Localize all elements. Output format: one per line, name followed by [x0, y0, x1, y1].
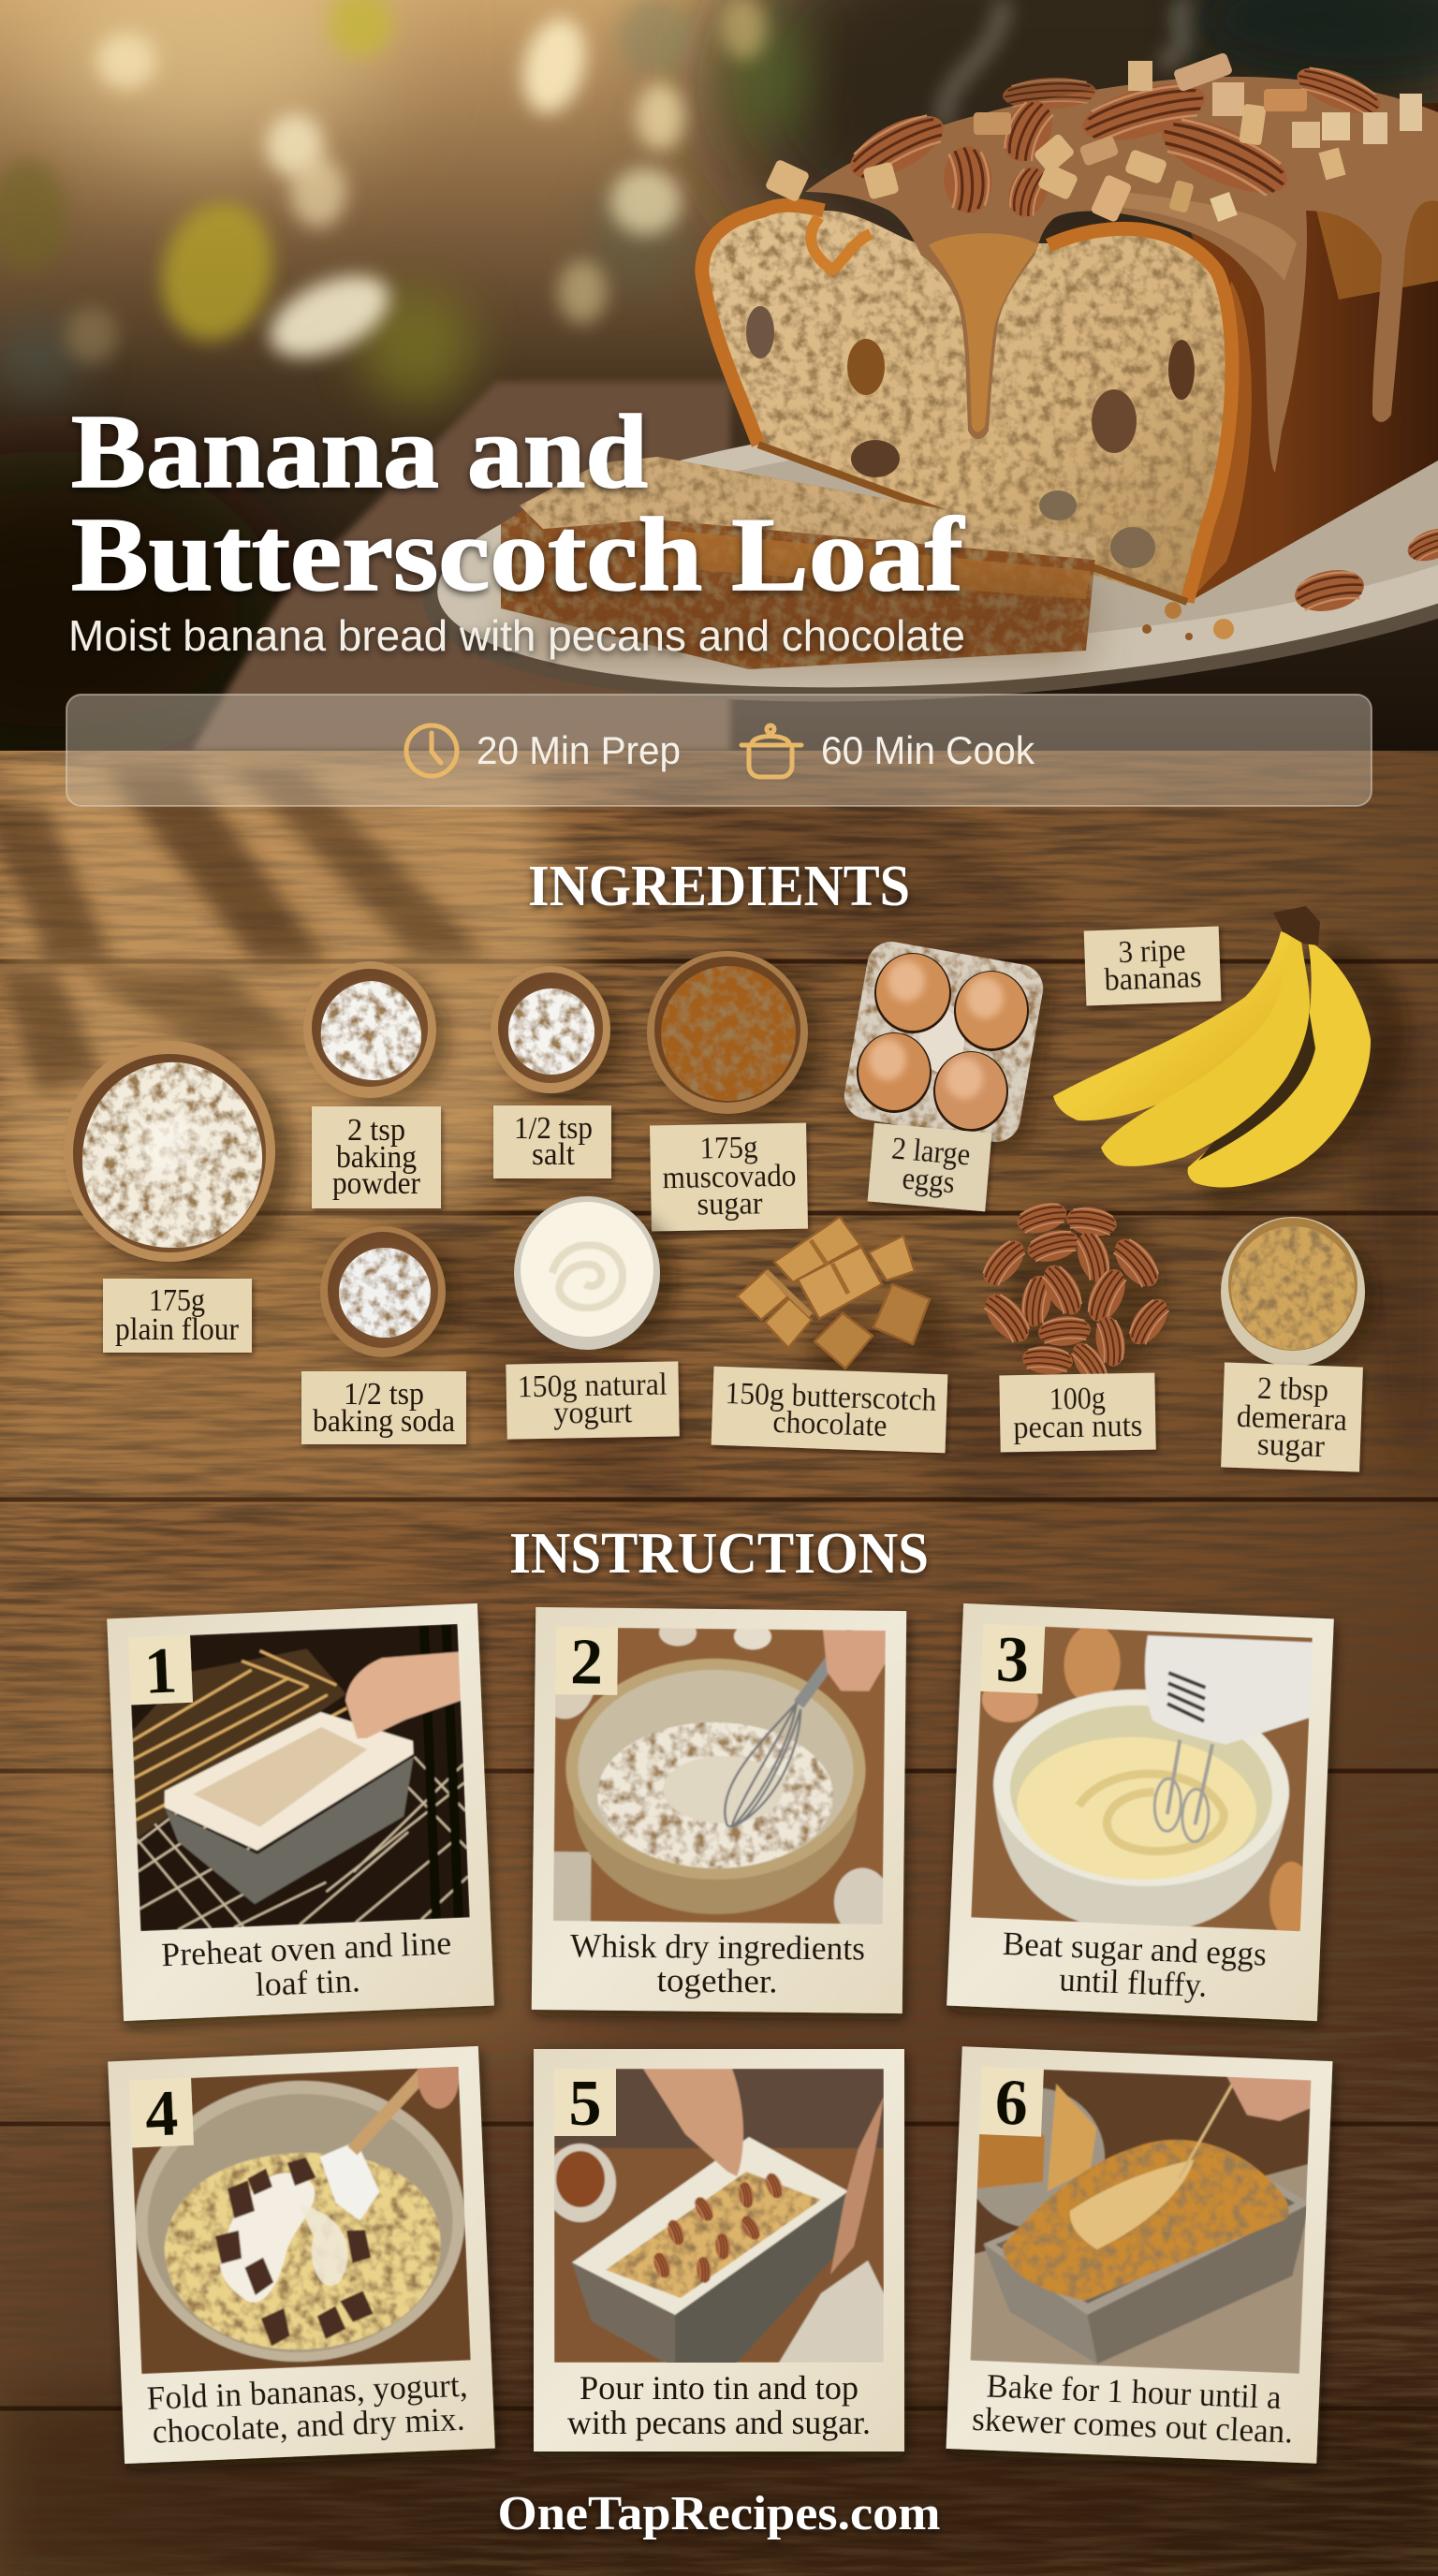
step 6 number tag: 6	[993, 2067, 1029, 2140]
heading: instructions: INSTRUCTIONS	[509, 1522, 929, 1586]
table cloth	[192, 382, 730, 751]
step 4 number tag	[129, 2077, 194, 2151]
hero photo: loaf on plate with bokeh background	[0, 0, 1438, 768]
step 4 caption: chocolate, and dry mix.	[152, 2400, 465, 2451]
label: 175g	[149, 1283, 205, 1318]
label: 100g	[1049, 1381, 1106, 1417]
ingredient: baking powder	[303, 961, 449, 1208]
ingredient: natural yogurt	[506, 1196, 680, 1440]
step 5 number tag: 5	[569, 2068, 601, 2140]
label: 175g	[699, 1130, 758, 1166]
step 4 number tag: 4	[143, 2077, 180, 2151]
label: salt	[532, 1137, 576, 1172]
label	[103, 1279, 252, 1353]
label: baking soda	[313, 1404, 455, 1439]
label: sugar	[697, 1186, 763, 1222]
label: powder	[332, 1166, 421, 1201]
plate	[423, 444, 1438, 702]
step 5 card	[534, 2049, 904, 2452]
label: 1/2 tsp	[514, 1111, 593, 1146]
label	[506, 1361, 680, 1440]
label: pecan nuts	[1013, 1409, 1143, 1445]
step 1 caption: loaf tin.	[255, 1962, 360, 2003]
step 5 number tag	[554, 2068, 616, 2140]
ingredient: baking soda	[301, 1226, 466, 1444]
step 1 card	[107, 1603, 494, 2021]
icon: cooking pot	[741, 725, 801, 777]
loaf	[702, 51, 1438, 603]
hero bokeh backdrop	[0, 0, 1438, 768]
prep time: 20 Min Prep	[477, 728, 681, 772]
icon: clock	[406, 725, 457, 776]
step 6 caption	[972, 2366, 1295, 2451]
front loaf slice	[501, 457, 1097, 669]
label	[301, 1371, 466, 1444]
step 1 photo: oven and lined tin	[128, 1624, 470, 1931]
label	[712, 1367, 947, 1453]
label: baking	[336, 1140, 417, 1175]
label	[493, 1105, 611, 1178]
cook time: 60 Min Cook	[821, 728, 1035, 772]
step 3 number tag	[980, 1623, 1045, 1697]
label: 150g butterscotch	[725, 1376, 937, 1418]
label: 2 large	[890, 1131, 972, 1173]
step 6 number tag	[979, 2066, 1044, 2141]
label: chocolate	[772, 1405, 888, 1443]
label: plain flour	[115, 1312, 240, 1347]
label: 3 ripe	[1118, 933, 1186, 970]
step 6 card	[946, 2046, 1332, 2464]
step 4 caption	[146, 2366, 470, 2451]
label: 1/2 tsp	[344, 1377, 424, 1412]
step 5 photo: pouring batter and adding pecans	[545, 2069, 884, 2368]
label	[650, 1123, 808, 1231]
label	[1084, 927, 1221, 1005]
ingredient: plain flour	[64, 1041, 296, 1353]
ingredient: eggs in carton	[841, 938, 1058, 1211]
step 4 photo: folding batter with chocolate	[128, 2044, 471, 2374]
step 6 photo: baked loaf with skewer	[956, 2066, 1315, 2374]
subtitle: Moist banana bread with pecans and chocolate	[68, 611, 965, 660]
step 1 caption	[160, 1924, 453, 2007]
step 2 caption	[569, 1926, 865, 2001]
step 3 caption: Beat sugar and eggs	[1002, 1925, 1268, 1973]
step 3 photo: beating batter with mixer	[971, 1620, 1322, 1939]
step 3 caption: until fluffy.	[1059, 1961, 1208, 2004]
label: eggs	[901, 1162, 956, 1200]
step 5 caption: Pour into tin and top	[580, 2369, 858, 2407]
title: Butterscotch Loaf	[71, 497, 965, 613]
step 3 card	[946, 1603, 1334, 2021]
step 2 number tag: 2	[570, 1626, 604, 1699]
label: yogurt	[553, 1395, 633, 1431]
label: demerara	[1236, 1399, 1348, 1438]
step 1 caption: Preheat oven and line	[160, 1924, 452, 1973]
ingredient: bananas	[1053, 906, 1386, 1189]
background: rustic wooden table	[0, 739, 1438, 2576]
label: bananas	[1104, 959, 1202, 998]
title: Banana and	[71, 394, 648, 510]
step 4 caption: Fold in bananas, yogurt,	[146, 2366, 468, 2417]
ingredient: muscovado sugar	[647, 951, 824, 1231]
step 1 number tag	[128, 1634, 193, 1708]
caramel glaze and drips	[805, 77, 1438, 473]
ingredient: demerara sugar	[1221, 1217, 1380, 1472]
label: muscovado	[662, 1159, 797, 1195]
title	[71, 394, 965, 613]
time info panel	[66, 695, 1372, 806]
pecan toppings	[765, 51, 1422, 223]
label	[312, 1106, 441, 1208]
loose pecans on plate	[1142, 522, 1438, 640]
ingredient: salt	[491, 966, 625, 1178]
label: 2 tsp	[347, 1113, 405, 1148]
label: 150g natural	[517, 1368, 668, 1404]
label: sugar	[1256, 1427, 1326, 1464]
step 1 number tag: 1	[142, 1634, 179, 1708]
ingredient: pecan nuts	[976, 1197, 1175, 1452]
label	[868, 1123, 991, 1211]
step 3 number tag: 3	[995, 1623, 1031, 1697]
step 2 photo: whisking flour	[531, 1618, 893, 1936]
step 6 caption: Bake for 1 hour until a	[986, 2367, 1282, 2416]
heading: ingredients: INGREDIENTS	[528, 855, 910, 918]
label	[1221, 1362, 1363, 1472]
step 2 caption: Whisk dry ingredients	[570, 1926, 865, 1968]
step 3 caption	[1001, 1925, 1268, 2007]
step 2 number tag	[555, 1626, 618, 1699]
footer website: OneTapRecipes.com	[498, 2487, 940, 2540]
ingredient: butterscotch chocolate	[712, 1217, 955, 1453]
step 5 caption	[567, 2369, 871, 2441]
label	[999, 1373, 1156, 1452]
step 5 caption: with pecans and sugar.	[567, 2404, 871, 2441]
step 4 card	[108, 2043, 495, 2464]
label: 2 tbsp	[1256, 1371, 1329, 1408]
step 6 caption: skewer comes out clean.	[972, 2400, 1294, 2451]
step 2 caption: together.	[656, 1961, 778, 2000]
step 2 card	[530, 1607, 906, 2013]
